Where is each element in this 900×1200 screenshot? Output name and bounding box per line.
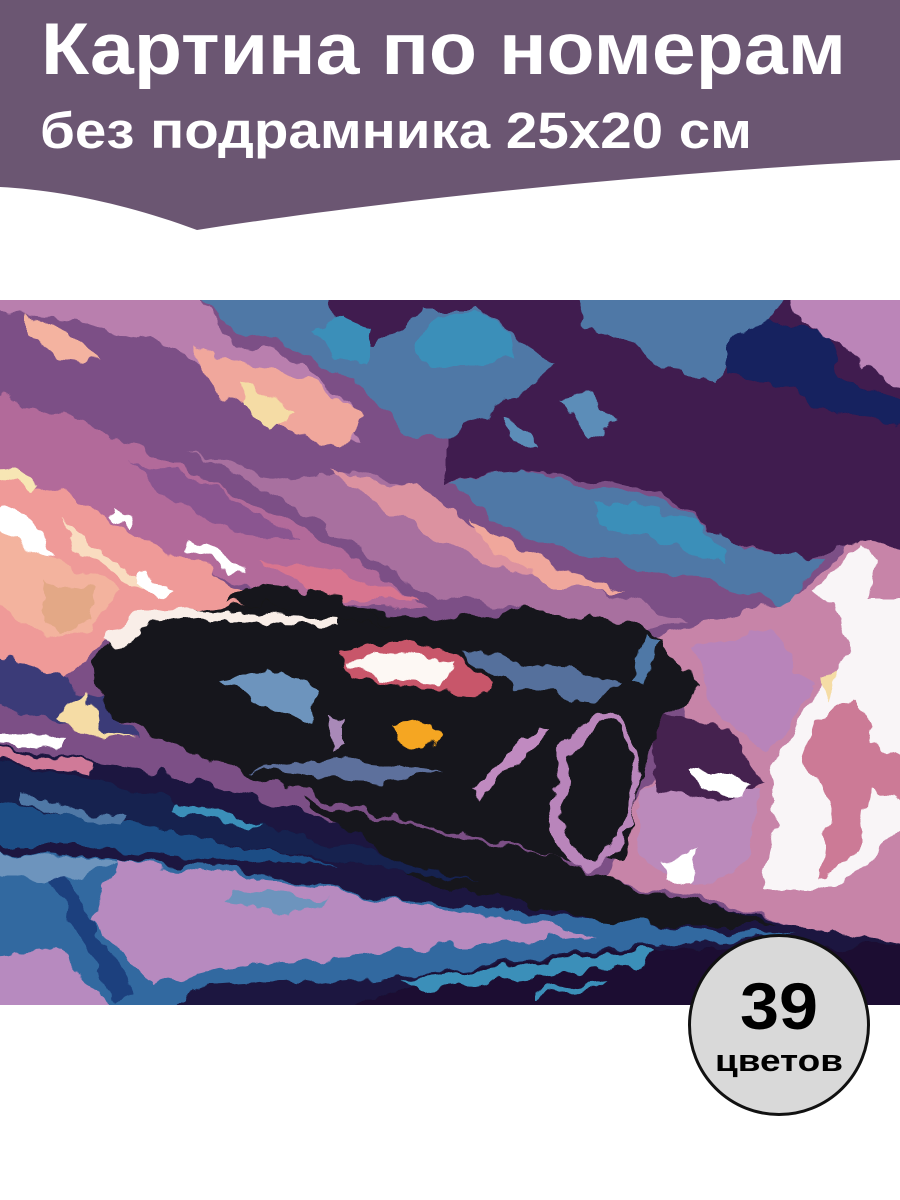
car: body white trim	[105, 610, 340, 650]
road: dark base	[0, 740, 900, 1030]
colour count badge	[690, 936, 868, 1114]
smoke: dark purple core	[650, 710, 765, 800]
sky: navy patch	[730, 320, 900, 435]
car: window reflection	[220, 672, 320, 720]
road: light blue streak	[0, 851, 796, 1005]
smoke: pink inner	[805, 700, 900, 880]
sky: lower left sunset glow	[0, 478, 244, 677]
car: body reflections	[328, 715, 345, 750]
car: roof	[226, 584, 346, 608]
sky: dark purple cloud mass	[315, 280, 900, 560]
smoke: pink mass on the right	[610, 540, 900, 960]
smoke: lower lilac	[636, 784, 760, 885]
sky: blue cloud top	[202, 300, 554, 439]
title: Картина по номерам	[41, 9, 846, 90]
smoke: white	[760, 545, 900, 895]
road: left speed streaks	[0, 650, 140, 740]
car: black body	[95, 600, 700, 860]
number of colours: 39	[740, 969, 818, 1043]
car	[95, 585, 700, 873]
painting: sports car drifting at sunset	[0, 270, 900, 1030]
sky: peach streaks	[25, 315, 100, 365]
car: orange lamp	[395, 725, 442, 745]
road: shoulder streaks	[0, 760, 480, 880]
sky: top right pink	[790, 300, 900, 388]
colours label: цветов	[715, 1043, 843, 1078]
sky: small blue wisps	[560, 392, 615, 435]
road: lilac surface	[90, 860, 600, 985]
car: tail light	[340, 640, 495, 692]
sky: bright cyan cloud	[415, 312, 515, 365]
sky: middle mauve band	[0, 390, 430, 610]
sky: lower band lilac highlights	[190, 450, 690, 630]
sky base	[0, 300, 900, 926]
header banner	[0, 0, 900, 230]
sky: top left lilac	[0, 300, 360, 443]
smoke: lilac shade	[690, 630, 810, 750]
sky: white highlights	[0, 505, 55, 555]
sky: top right blue	[580, 300, 784, 383]
road: dark streak under the car	[300, 800, 780, 925]
car: rear wheel	[548, 712, 642, 874]
subtitle: без подрамника 25х20 см	[40, 102, 752, 159]
sky: lower blue cloud	[450, 470, 820, 605]
